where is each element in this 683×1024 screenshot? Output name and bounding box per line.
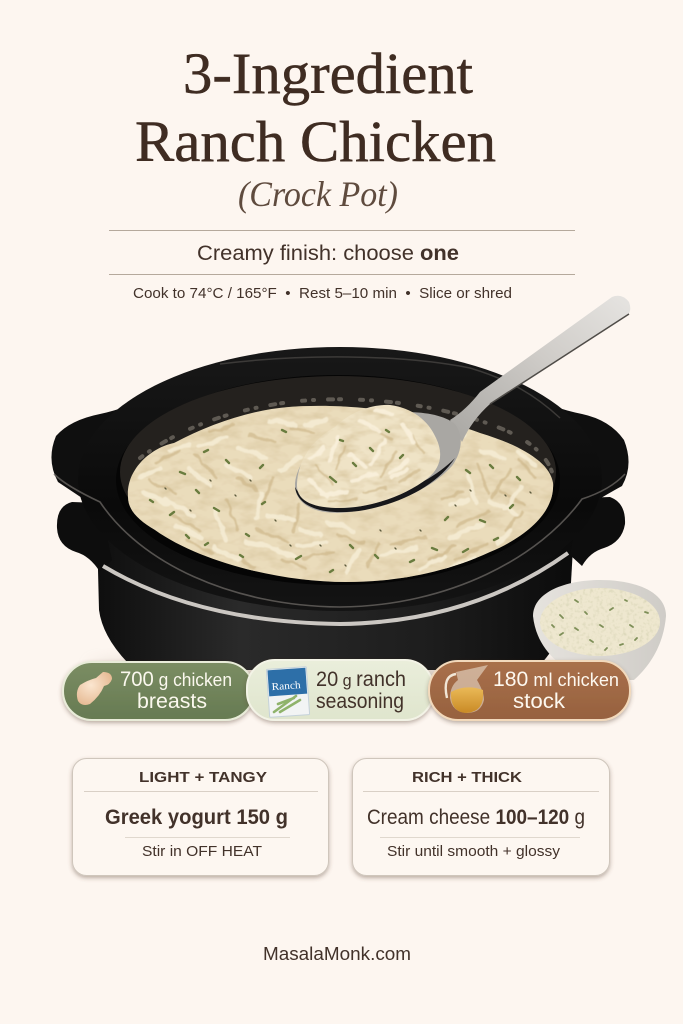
title: Ranch Chicken: [135, 109, 496, 174]
food: pepper specks: [165, 480, 531, 566]
label: 700 g chicken breasts: 700 g chicken: [120, 668, 232, 691]
lower left handle: [57, 502, 112, 572]
spoon bowl: [295, 412, 461, 513]
seasoning powder: [540, 588, 660, 656]
rim highlights: [54, 357, 625, 607]
bowl of ranch seasoning: [533, 580, 666, 680]
pot rim: [78, 347, 602, 611]
food: shreds: [140, 420, 536, 572]
label: 20 g ranch seasoning: seasoning: [316, 690, 404, 713]
bowl: [533, 580, 666, 680]
pot rim right handle: [520, 392, 629, 520]
lower right handle: [570, 497, 625, 566]
food: shredded chicken: [128, 406, 553, 582]
ingredient pills: [63, 660, 630, 720]
card: light + tangy: [72, 758, 328, 876]
card main text: Greek yogurt 150 g: [105, 806, 288, 829]
herb flecks in powder: [552, 600, 648, 650]
spoon handle: [450, 296, 630, 442]
pill: chicken breasts: [63, 662, 254, 720]
splatter on inner wall: [140, 399, 552, 472]
title: 3-Ingredient: [183, 41, 473, 106]
silver band: [103, 553, 568, 624]
pill: ranch seasoning: [247, 660, 433, 720]
pill: chicken stock: [429, 661, 630, 720]
card heading: RICH + THICK: [412, 770, 523, 786]
icon: ranch packet: Ranch: [271, 680, 302, 693]
crock pot illustration: [51, 296, 666, 680]
card: rich + thick: [352, 758, 610, 876]
icon: chicken drumstick: [77, 672, 112, 705]
card note: Stir in OFF HEAT: [142, 843, 262, 860]
spoon food shreds: [310, 410, 424, 502]
food: herb flecks: [150, 428, 520, 572]
pot rim left handle: [51, 392, 160, 520]
label: 700 g chicken breasts: [120, 668, 232, 713]
footer: website: MasalaMonk.com: [263, 943, 411, 964]
pot inner wall: [116, 375, 560, 585]
label: 180 ml chicken stock: [493, 668, 619, 713]
pot body: [97, 530, 574, 670]
label: 700 g chicken breasts: breasts: [137, 690, 207, 713]
icon: pitcher of stock: [446, 665, 488, 713]
subtitle: crock pot: (Crock Pot): [238, 174, 398, 214]
label: 20 g ranch seasoning: [316, 668, 406, 713]
label: 180 ml chicken stock: 180 ml chicken: [493, 668, 619, 691]
card main text: Cream cheese 100–120 g: [367, 806, 585, 829]
title: [135, 41, 496, 174]
heading: creamy finish: Creamy finish: choose one: [197, 242, 459, 265]
cooking instructions line: Cook to 74°C / 165°F • Rest 5–10 min • Slice or shred: [133, 285, 512, 302]
label: 180 ml chicken stock: stock: [513, 690, 566, 713]
label: 20 g ranch seasoning: 20 g ranch: [316, 668, 406, 691]
card heading: LIGHT + TANGY: [139, 770, 267, 786]
card note: Stir until smooth + glossy: [387, 843, 561, 860]
spoon rim shadow: [295, 458, 455, 512]
spoon food herbs: [330, 430, 403, 482]
food in spoon: [297, 405, 440, 508]
icon: ranch packet: [266, 667, 310, 717]
shadow under pot: [90, 658, 590, 678]
